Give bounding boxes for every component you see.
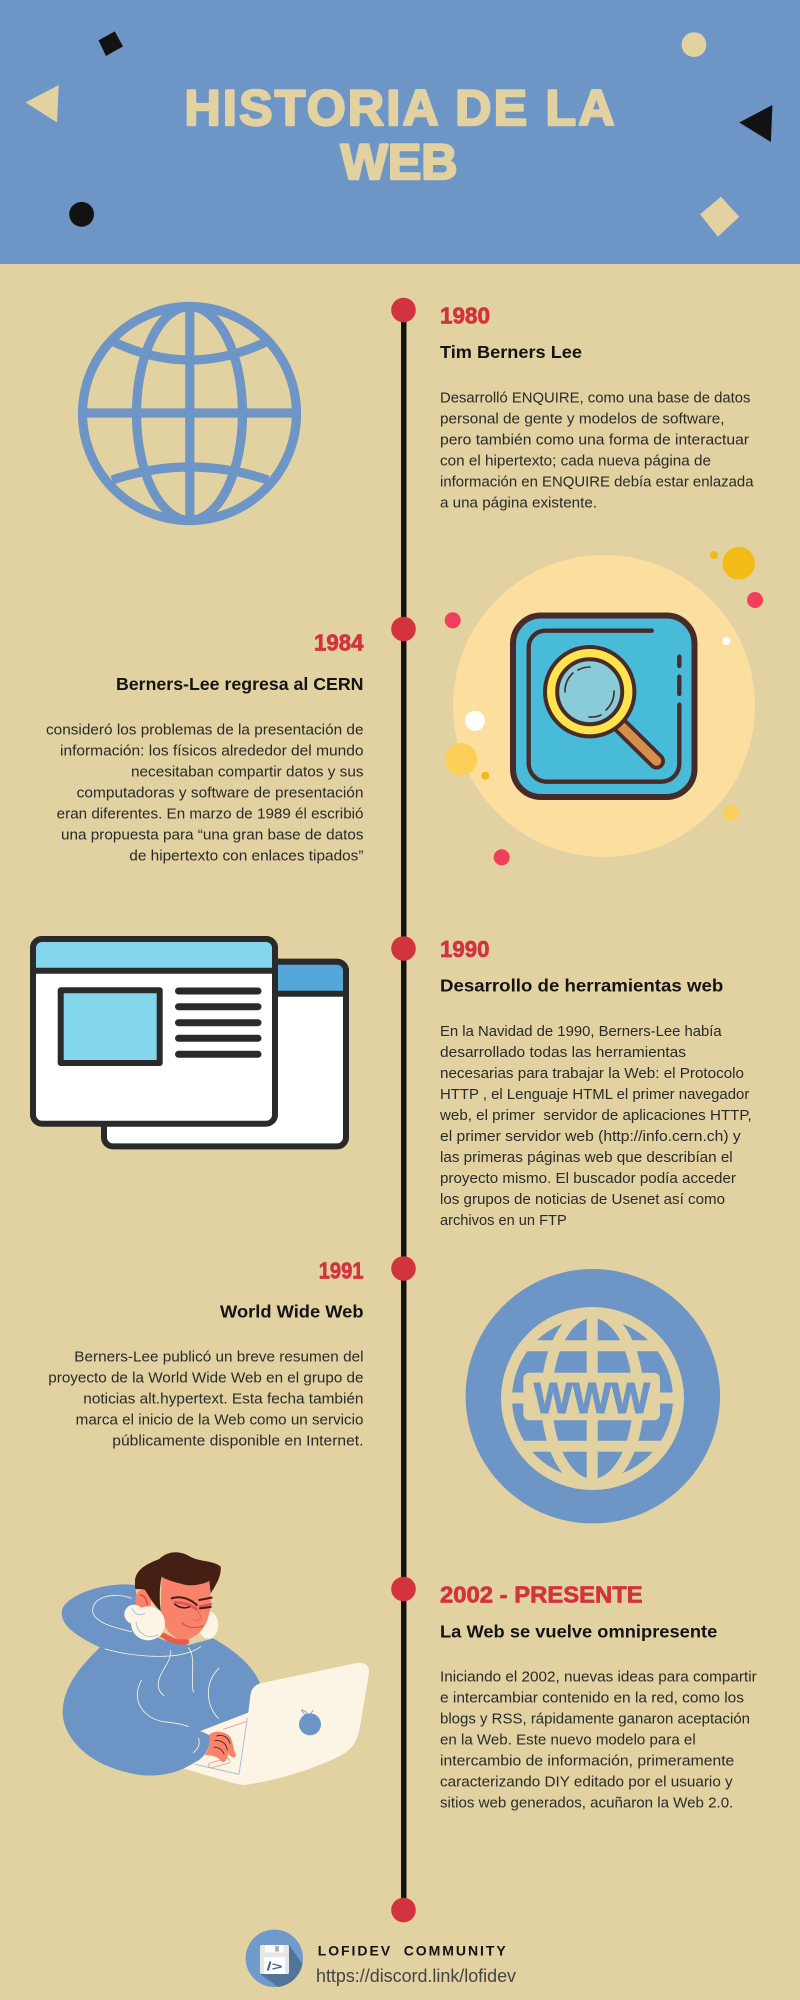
footer text: https://discord.link/lofidev [316, 1966, 516, 1986]
entry 1984: Berners-Lee regresa al CERN [116, 674, 364, 694]
hoodie sleeve [140, 1732, 210, 1775]
icon: beige triangle [26, 85, 59, 122]
ear [135, 1589, 151, 1611]
entry 1980: 1980 [440, 303, 490, 329]
entry 2002: en la Web. Este nuevo modelo para el [440, 1733, 696, 1749]
right headphone [198, 1611, 218, 1639]
title: WEB [340, 134, 458, 190]
hand [205, 1732, 236, 1762]
face [161, 1577, 211, 1639]
icon: browser windows [33, 939, 346, 1146]
entry 2002: caracterizando DIY editado por el usuario y [440, 1775, 733, 1791]
icon: magnifier badge [445, 547, 763, 865]
entry 2002 [440, 1582, 757, 1812]
entry 1990: los grupos de noticias de Usenet así como [440, 1192, 725, 1208]
entry 1990: En la Navidad de 1990, Berners-Lee había [440, 1024, 723, 1040]
entry 1991: públicamente disponible en Internet. [112, 1434, 364, 1450]
entry 1984: de hipertexto con enlaces tipados” [129, 848, 364, 864]
entry 1990: las primeras páginas web que describían el [440, 1150, 733, 1166]
entry 2002: La Web se vuelve omnipresente [440, 1621, 718, 1641]
entry 1980: con el hipertexto; cada nueva página de [440, 454, 711, 470]
entry 1984: computadoras y software de presentación [77, 786, 363, 802]
icon: floppy logo [246, 1930, 303, 1987]
neck [160, 1632, 189, 1645]
entry 1980 [440, 303, 754, 512]
entry 1980: Desarrolló ENQUIRE, como una base de datos [440, 390, 750, 406]
entry 1984: una propuesta para “una gran base de datos [61, 828, 364, 844]
entry 1984: 1984 [314, 630, 364, 656]
icon: black circle [69, 202, 94, 227]
entry 1991: 1991 [319, 1258, 364, 1284]
hoodie lines and drawstrings [93, 1595, 219, 1727]
entry 2002: e intercambiar contenido en la red, como los [440, 1691, 744, 1707]
icon: beige circle [682, 32, 706, 57]
header band [0, 0, 800, 264]
footer text: LOFIDEV COMMUNITY [318, 1942, 506, 1958]
entry 1984 [46, 630, 364, 864]
entry 1980: Tim Berners Lee [440, 342, 582, 362]
entry 2002: intercambio de información, primeramente [440, 1754, 734, 1770]
title [184, 80, 614, 190]
entry 1990: 1990 [440, 936, 490, 962]
entry 1991 [48, 1258, 364, 1450]
entry 1984: información: los físicos alrededor del mundo [60, 744, 364, 760]
entry 1990: web, el primer servidor de aplicaciones HTTP, [439, 1108, 752, 1124]
hair [135, 1552, 221, 1611]
illustration: developer with laptop [62, 1552, 369, 1785]
entry 1980: a una página existente. [440, 496, 597, 512]
icon: www globe: WWW [534, 1374, 651, 1423]
entry 1980: pero también como una forma de interactuar [440, 432, 749, 448]
entry 1984: eran diferentes. En marzo de 1989 él escribió [57, 806, 363, 822]
entry 1991: World Wide Web [220, 1301, 364, 1321]
entry 1984: necesitaban compartir datos y sus [131, 764, 364, 780]
entry 1991: proyecto de la World Wide Web en el grupo de [48, 1371, 364, 1387]
entry 1991: marca el inicio de la Web como un servicio [76, 1413, 363, 1429]
icon: black diamond [98, 31, 123, 56]
entry 2002: 2002 - PRESENTE [440, 1582, 643, 1608]
entry 2002: Iniciando el 2002, nuevas ideas para compartir [440, 1670, 757, 1686]
icon: www globe [466, 1269, 720, 1523]
hoodie [62, 1584, 260, 1775]
head [124, 1552, 221, 1645]
footer text [316, 1942, 516, 1986]
icon: beige diamond [700, 197, 739, 237]
icon: globe [82, 306, 297, 521]
entry 1991: Berners-Lee publicó un breve resumen del [74, 1350, 364, 1366]
entry 1990: el primer servidor web (http://info.cern.ch) y [440, 1129, 742, 1145]
facial features [172, 1597, 212, 1627]
entry 1980: información en ENQUIRE debía estar enlazada [440, 474, 754, 490]
entry 1990: desarrollado todas las herramientas [440, 1045, 686, 1061]
left headphone [124, 1605, 144, 1624]
entry 1980: personal de gente y modelos de software, [440, 412, 724, 428]
entry 1984: consideró los problemas de la presentación de [46, 722, 364, 738]
keyboard [195, 1718, 247, 1774]
entry 1991: noticias alt.hypertext. Esta fecha también [83, 1392, 364, 1408]
entry 1990: archivos en un FTP [440, 1213, 567, 1229]
entry 1990 [439, 936, 752, 1229]
apple logo [299, 1713, 321, 1735]
laptop [183, 1663, 369, 1785]
entry 2002: blogs y RSS, rápidamente ganaron aceptación [440, 1712, 750, 1728]
entry 1990: Desarrollo de herramientas web [440, 976, 723, 996]
title: HISTORIA DE LA [184, 80, 614, 136]
entry 1990: necesarias para trabajar la Web: el Protocolo [440, 1066, 744, 1082]
timeline [391, 298, 416, 1922]
entry 1990: proyecto mismo. El buscador podía acceder [440, 1171, 736, 1187]
entry 2002: sitios web generados, acuñaron la Web 2.0. [440, 1796, 733, 1812]
icon: floppy logo: /> [266, 1960, 282, 1974]
icon: black triangle [739, 105, 772, 142]
entry 1990: HTTP , el Lenguaje HTML el primer navegador [440, 1087, 749, 1103]
